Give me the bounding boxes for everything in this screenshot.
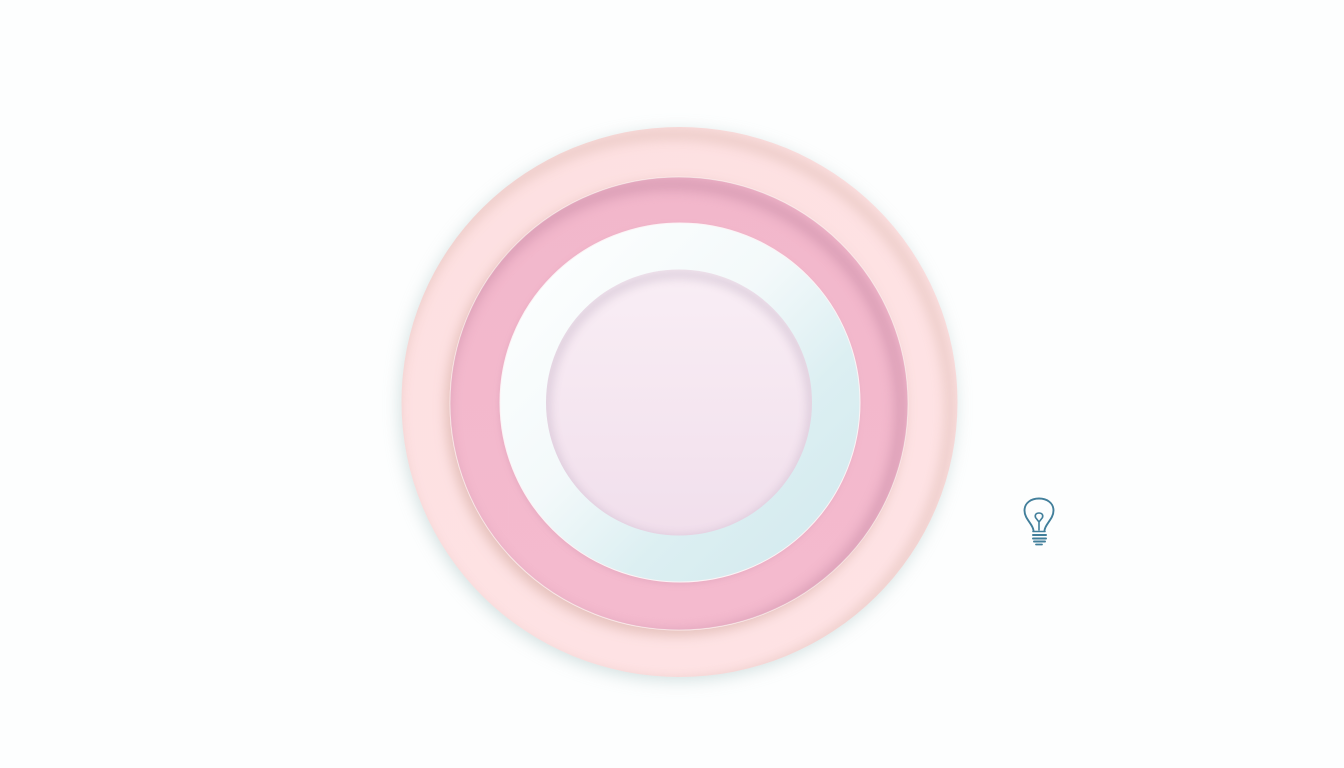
infographic canvas: [394, 125, 1054, 687]
outer ring: [394, 127, 958, 684]
second ring: [443, 177, 908, 637]
icon: light bulb: [1024, 498, 1054, 544]
third ring: [500, 223, 860, 582]
inner circle: [546, 270, 812, 540]
